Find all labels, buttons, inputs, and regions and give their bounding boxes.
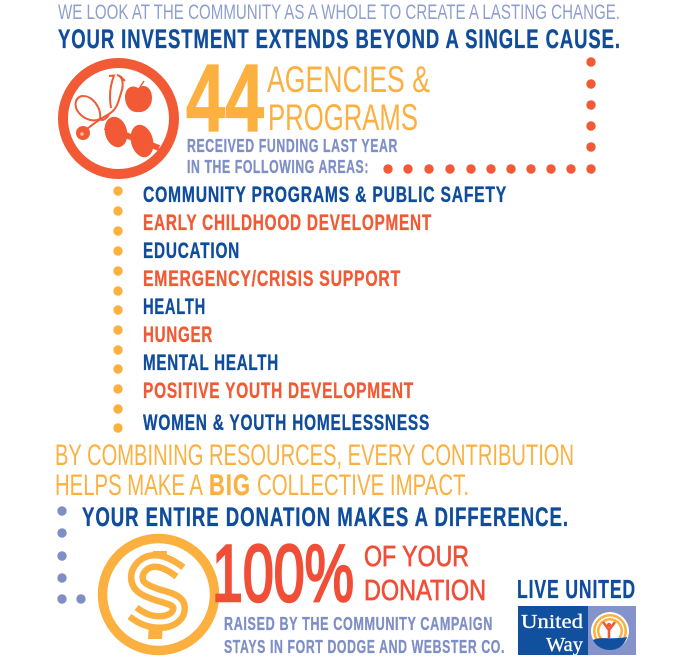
list of funding areas: EMERGENCY/CRISIS SUPPORT: [143, 266, 401, 291]
logo: United Way: Way: [546, 634, 583, 656]
funding caption: RECEIVED FUNDING LAST YEAR: [187, 136, 398, 156]
stat: 44 agencies and programs: 44: [186, 45, 264, 152]
list of funding areas: POSITIVE YOUTH DEVELOPMENT: [143, 378, 414, 403]
funding caption: IN THE FOLLOWING AREAS:: [187, 157, 369, 177]
list of funding areas: WOMEN & YOUTH HOMELESSNESS: [143, 410, 430, 435]
list of funding areas: [143, 182, 507, 435]
statement: combining resources: COLLECTIVE IMPACT.: [257, 469, 469, 502]
slogan: live united: LIVE UNITED: [517, 574, 636, 604]
donation caption: RAISED BY THE COMMUNITY CAMPAIGN: [224, 614, 493, 634]
statement: combining resources: HELPS MAKE A: [55, 469, 203, 502]
dotted connector: orange: [113, 186, 123, 433]
stat: 100 percent of your donation: DONATION: [364, 575, 486, 607]
stat: 44 agencies and programs: AGENCIES &: [267, 59, 430, 100]
icon: dollar coin: [102, 538, 214, 650]
stat: 100 percent of your donation: OF YOUR: [364, 541, 469, 573]
logo: United Way: United: [521, 611, 583, 633]
dotted connector: red: [383, 57, 596, 174]
funding caption: [187, 136, 398, 177]
donation caption: [224, 614, 505, 657]
stat: 44 agencies and programs: PROGRAMS: [268, 97, 418, 138]
list of funding areas: HUNGER: [143, 322, 213, 347]
list of funding areas: HEALTH: [143, 294, 206, 319]
statement: combining resources: [55, 439, 574, 502]
dotted connector: blue: [57, 506, 86, 604]
statement: combining resources: BIG: [209, 469, 251, 502]
list of funding areas: EARLY CHILDHOOD DEVELOPMENT: [143, 210, 432, 235]
list of funding areas: MENTAL HEALTH: [143, 350, 279, 375]
logo: United Way: [518, 606, 636, 656]
list of funding areas: COMMUNITY PROGRAMS & PUBLIC SAFETY: [143, 182, 507, 207]
list of funding areas: EDUCATION: [143, 238, 240, 263]
donation caption: STAYS IN FORT DODGE AND WEBSTER CO.: [224, 637, 505, 657]
icon: stethoscope, apple and dumbbell: [63, 63, 174, 174]
stat: 100 percent of your donation: 100%: [212, 529, 354, 619]
stat: 44 agencies and programs: [186, 45, 430, 152]
